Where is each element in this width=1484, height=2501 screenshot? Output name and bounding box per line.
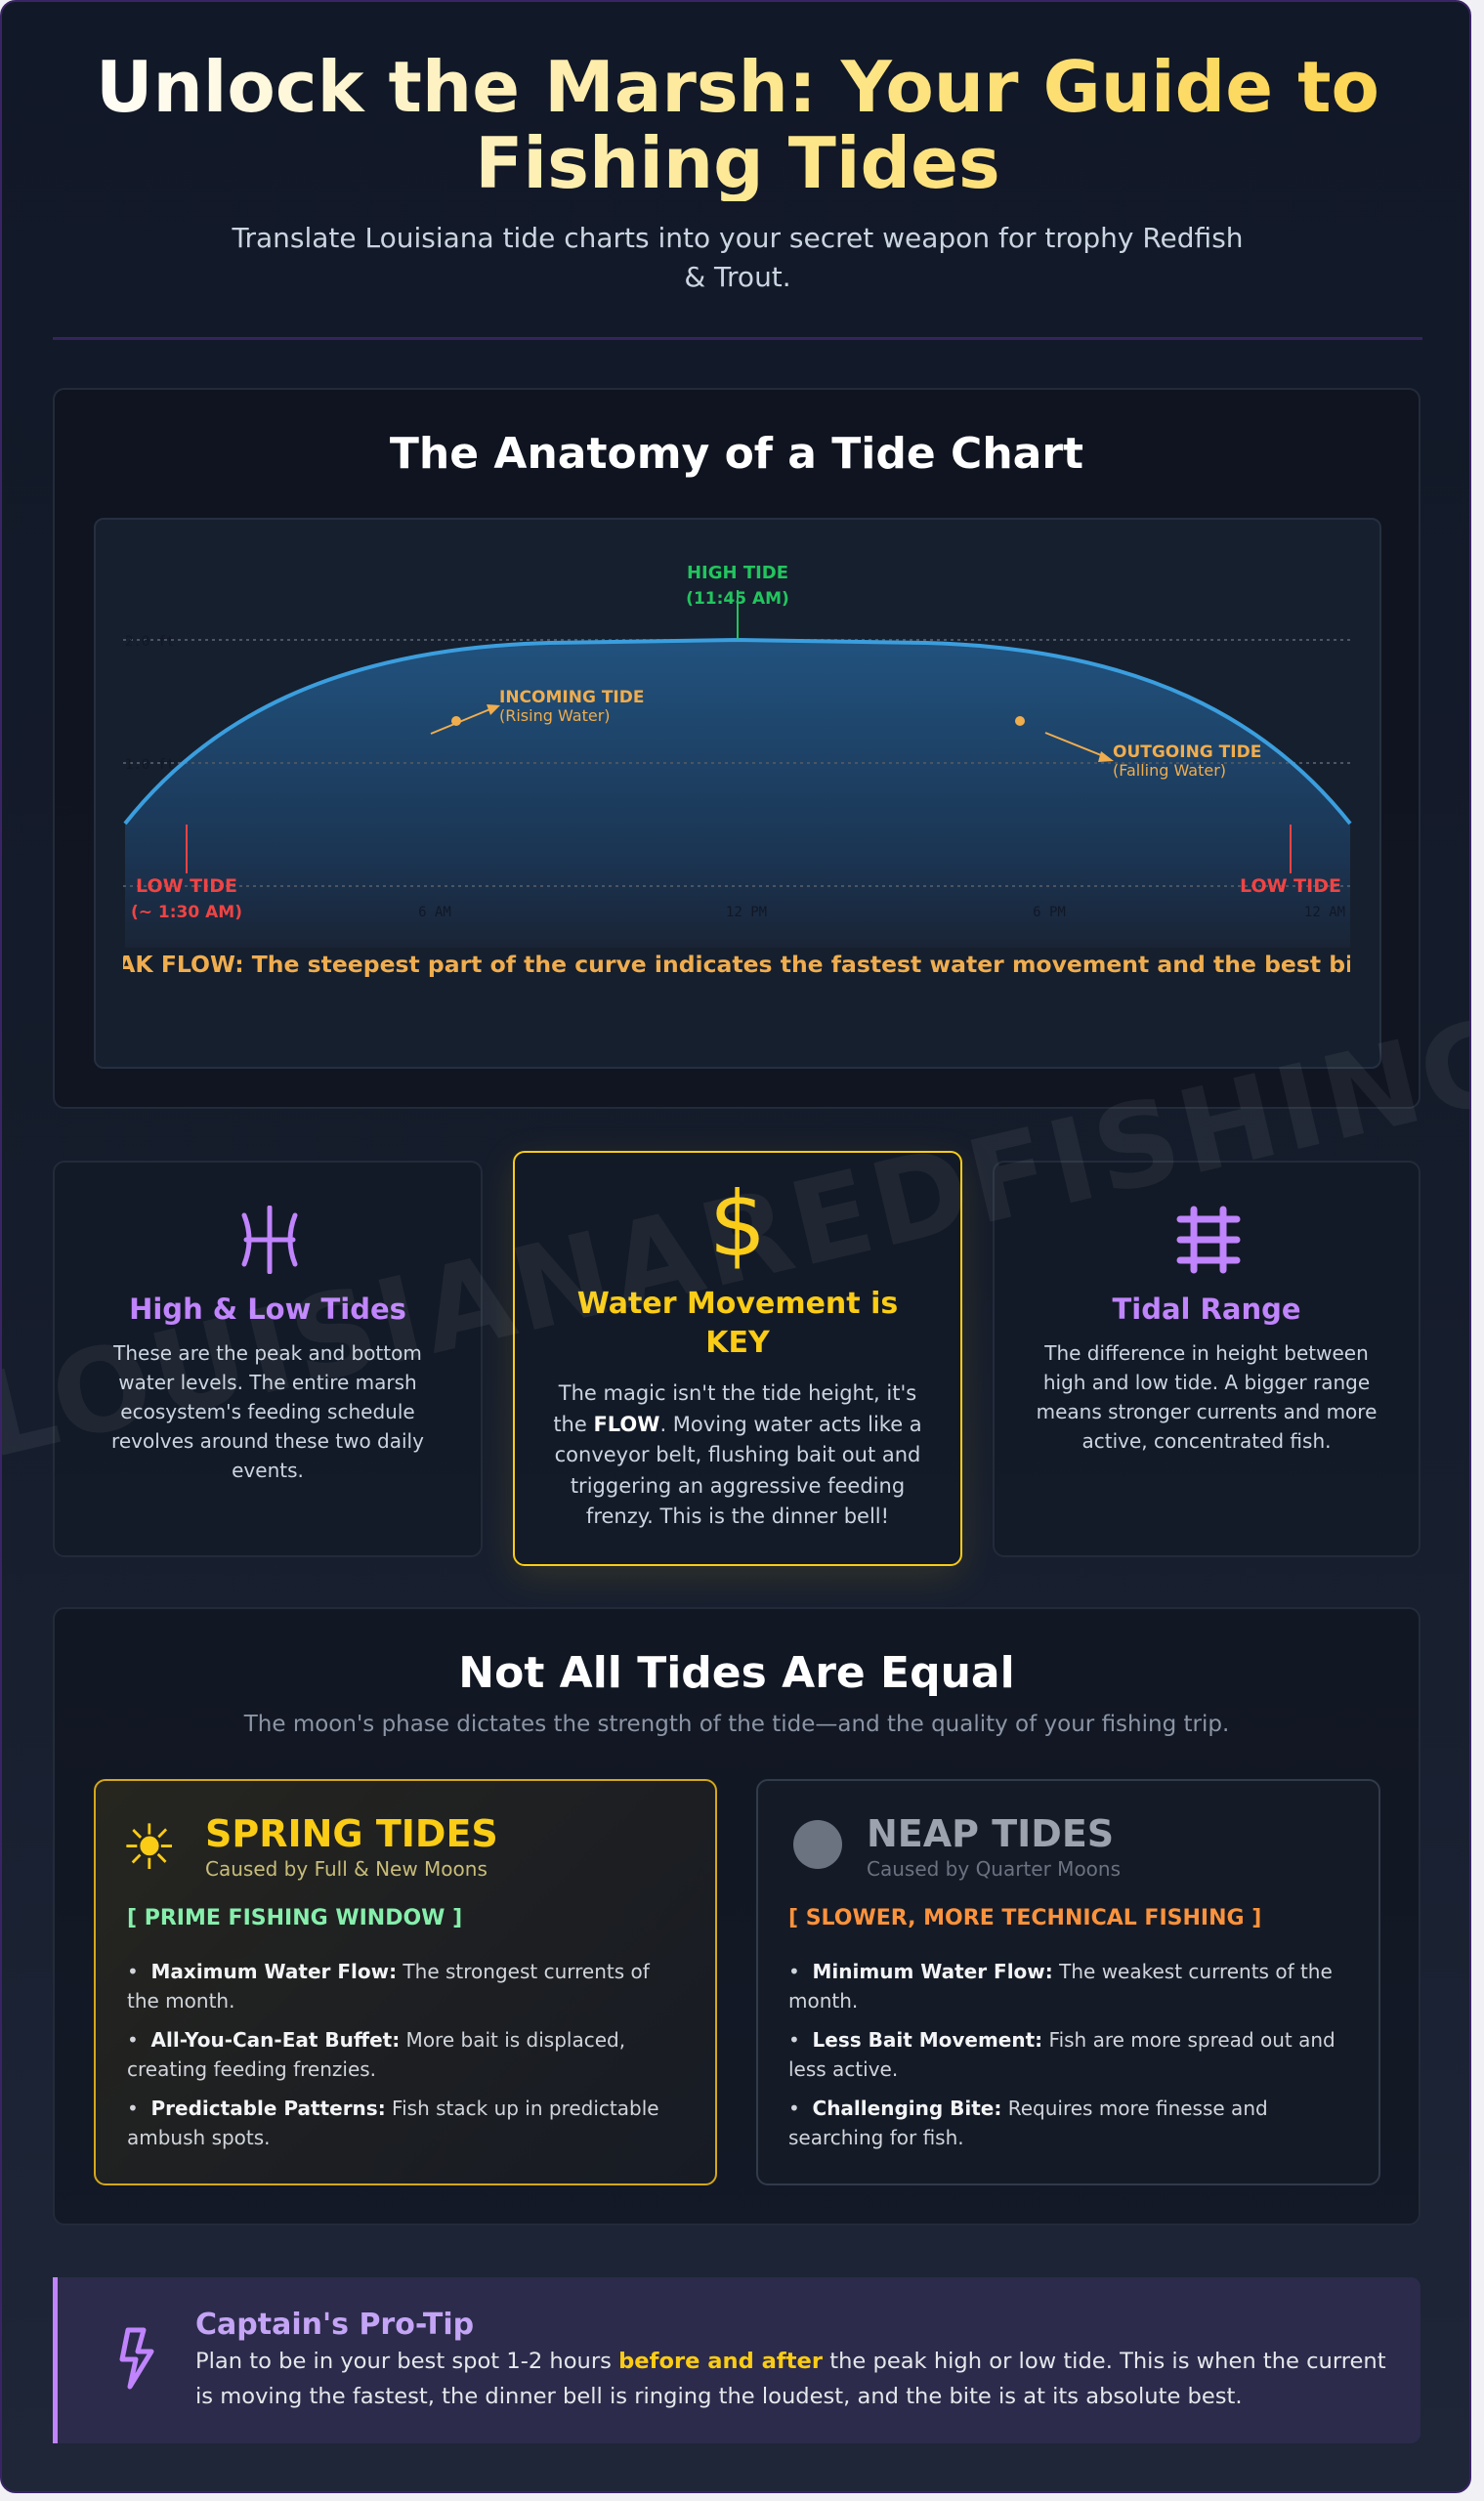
card: neap tides: Caused by Quarter Moons: [867, 1857, 1121, 1881]
card: spring tides: [94, 1779, 717, 2185]
card: tidal range: The difference in height between high and low tide. A bigger range means stronger currents and more active, concentrated fish.: [1037, 1341, 1377, 1453]
panel: tide chart: [53, 388, 1420, 1109]
axis labels: 12 PM: [726, 905, 767, 920]
icon: bolt: [119, 2327, 154, 2390]
high tide marker: HIGH TIDE: [687, 563, 788, 583]
card: spring tides: [ PRIME FISHING WINDOW ]: [127, 1906, 462, 1930]
icon: rails: [1176, 1206, 1241, 1274]
heading: Not All Tides Are Equal: [458, 1648, 1015, 1698]
card: spring tides: • Predictable Patterns: Fish stack up in predictable ambush spots.: [127, 2097, 659, 2149]
card: water movement: The magic isn't the tide height, it's the FLOW. Moving water acts like a conveyor belt, flushing bait out and triggering an aggressive feeding frenzy. This is the dinner bell!: [553, 1381, 922, 1528]
icon: pisces: [242, 1206, 297, 1274]
card: neap tides: • Challenging Bite: Requires more finesse and searching for fish.: [788, 2097, 1268, 2149]
chart: [94, 518, 1381, 1069]
outgoing tide: (Falling Water): [1113, 761, 1226, 780]
peak flow note: PEAK FLOW: The steepest part of the curve indicates the fastest water movement and the best bite!: [94, 951, 1381, 978]
card: water movement: Water Movement is: [577, 1287, 898, 1321]
axis labels: 12 AM: [1304, 905, 1345, 920]
card: neap tides: • Minimum Water Flow: The weakest currents of the month.: [788, 1960, 1333, 2013]
card: tidal range: Tidal Range: [1112, 1293, 1301, 1326]
low tide markers: (~ 1:30 AM): [131, 903, 242, 922]
icon: sun: ☀: [121, 1812, 177, 1885]
card: tidal range: [993, 1161, 1420, 1557]
card: water movement: [513, 1151, 962, 1566]
incoming tide: INCOMING TIDE: [499, 688, 644, 707]
panel: not all tides equal: [53, 1607, 1420, 2225]
card: neap tides: • Less Bait Movement: Fish are more spread out and less active.: [788, 2028, 1336, 2081]
high tide marker: (11:45 AM): [686, 589, 789, 609]
chart: 2.0 ft: [125, 634, 175, 650]
title: Unlock the Marsh: Your Guide to: [96, 46, 1379, 128]
card: neap tides: [756, 1779, 1380, 2185]
card: high & low tides: These are the peak and bottom water levels. The entire marsh ecosystem's feeding schedule revolves around these two daily events.: [111, 1341, 424, 1482]
callout: pro tip: Captain's Pro-Tip: [195, 2308, 474, 2342]
water area: [125, 640, 1350, 948]
chart: 1.0 ft: [125, 757, 175, 773]
card: spring tides: SPRING TIDES: [205, 1812, 498, 1855]
axis labels: 6 AM: [418, 905, 451, 920]
subtitle: Translate Louisiana tide charts into your secret weapon for trophy Redfish & Trout.: [232, 222, 1244, 293]
outgoing tide: OUTGOING TIDE: [1113, 742, 1261, 762]
card: spring tides: Caused by Full & New Moons: [205, 1857, 488, 1881]
outgoing tide: [1015, 716, 1261, 780]
low tide markers: [131, 825, 1341, 922]
card: water movement: KEY: [705, 1326, 770, 1360]
axis labels: [418, 905, 1345, 920]
subheading: The moon's phase dictates the strength of the tide—and the quality of your fishing trip.: [244, 1712, 1229, 1737]
card: spring tides: • Maximum Water Flow: The strongest currents of the month.: [127, 1960, 650, 2013]
axis labels: 6 PM: [1033, 905, 1066, 920]
title: [41, 49, 1434, 201]
card: high & low tides: [53, 1161, 483, 1557]
card: high & low tides: High & Low Tides: [129, 1293, 406, 1326]
card: neap tides: NEAP TIDES: [867, 1812, 1114, 1855]
callout: pro tip: [53, 2277, 1420, 2443]
incoming tide: [431, 688, 644, 734]
curve: [125, 640, 1350, 824]
icon: dollar: $: [709, 1172, 766, 1277]
icon: moon: [793, 1820, 842, 1869]
card: neap tides: [ SLOWER, MORE TECHNICAL FISHING ]: [788, 1906, 1261, 1930]
card: spring tides: • All-You-Can-Eat Buffet: More bait is displaced, creating feeding frenzies.: [127, 2028, 625, 2081]
callout: pro tip: Plan to be in your best spot 1-2 hours before and after the peak high or low tide. This is when the current is moving the fastest, the dinner bell is ringing the loudest, and the bite is at its absolute best.: [195, 2349, 1386, 2409]
low tide markers: LOW TIDE: [136, 875, 237, 897]
heading: anatomy: The Anatomy of a Tide Chart: [390, 429, 1083, 479]
incoming tide: (Rising Water): [499, 706, 611, 725]
title: Fishing Tides: [475, 122, 1000, 204]
high tide marker: [686, 563, 789, 640]
low tide markers: LOW TIDE: [1240, 875, 1341, 897]
